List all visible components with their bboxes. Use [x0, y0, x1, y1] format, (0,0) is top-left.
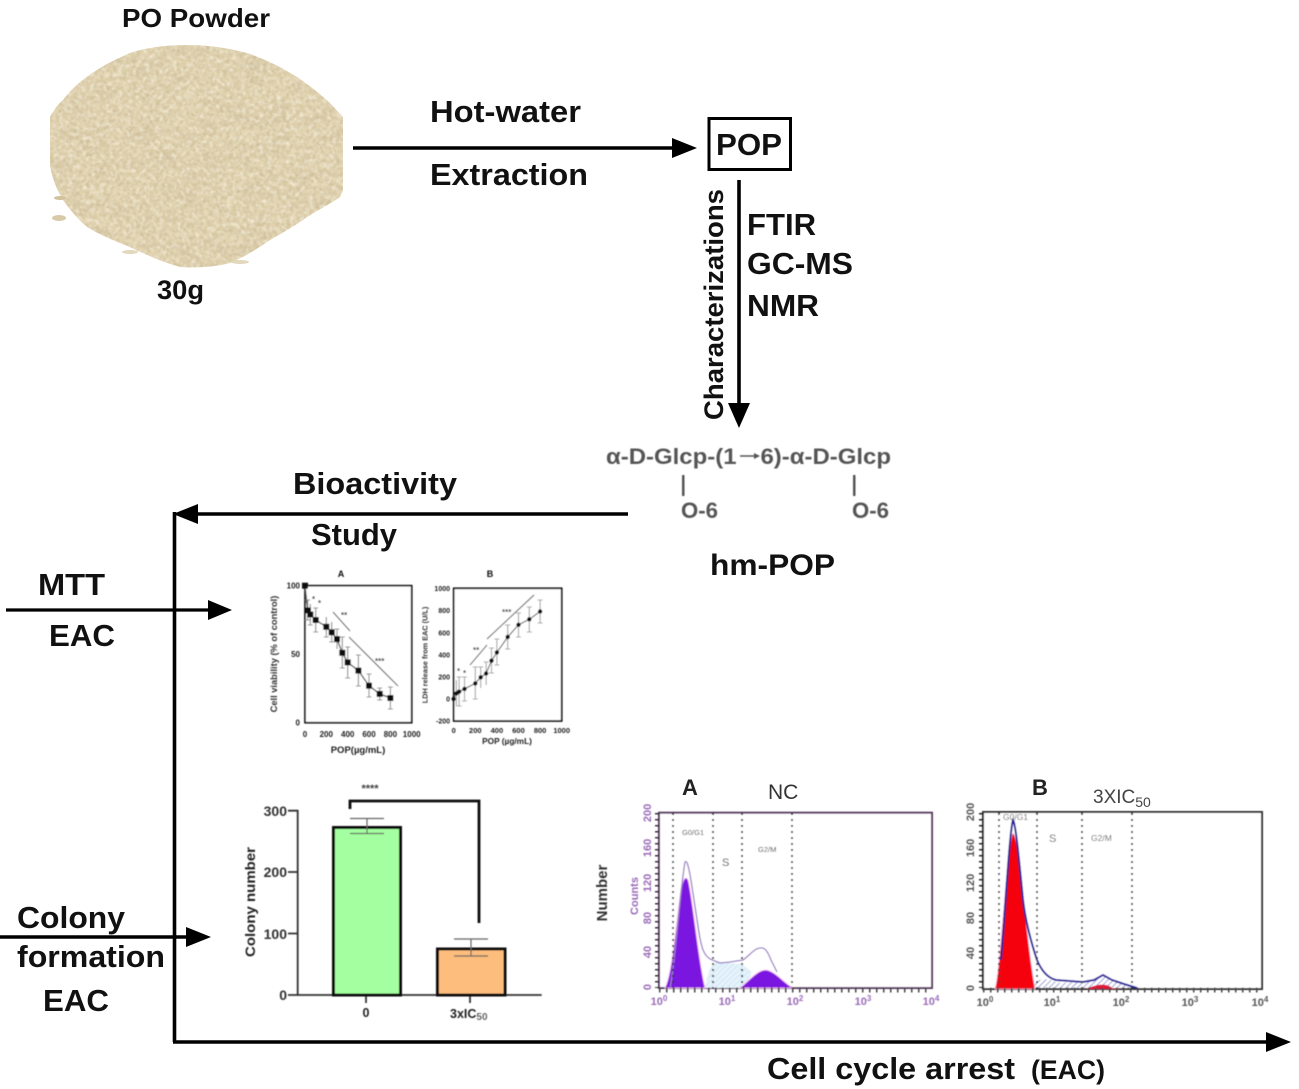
structure: repeating unit: α-D-Glcp-(1 →6)-α-D-Glcp: [606, 444, 891, 469]
chart: flow cytometry 3XIC50: 10: [1113, 997, 1125, 1009]
chart B: LDH release: 200: [438, 674, 450, 682]
arrow: MTT to viability charts: [6, 600, 232, 620]
chart: flow cytometry NC: 10: [719, 996, 731, 1008]
chart A: cell viability: 0: [303, 730, 308, 739]
chart: flow cytometry 3XIC50: 10: [1182, 997, 1194, 1009]
icon: powder heap: [45, 40, 350, 272]
chart: flow cytometry 3XIC50: [965, 803, 1269, 1009]
label: Number axis: Number: [594, 865, 611, 921]
chart B: LDH release: 800: [438, 608, 450, 615]
label: EAC (MTT): EAC: [49, 618, 115, 653]
structure: repeating unit: O-6: [852, 498, 889, 523]
chart: flow cytometry NC: [629, 804, 940, 1008]
structure: repeating unit: O-6: [681, 498, 718, 523]
chart B: LDH release: 800: [534, 726, 546, 735]
chart A: cell viability: [269, 569, 421, 756]
label: Study: Study: [311, 517, 398, 552]
chart A: cell viability: 50: [291, 650, 301, 659]
heading: B 3XIC50: B: [1032, 775, 1048, 800]
chart B: LDH release: **: [473, 646, 480, 655]
chart B: LDH release: 1000: [553, 726, 570, 735]
chart: flow cytometry 3XIC50: 40: [965, 947, 977, 959]
chart B: LDH release: 600: [512, 726, 525, 735]
label: 30g: 30g: [157, 275, 204, 305]
chart: flow cytometry NC: 4: [935, 994, 940, 1003]
text block: characterization methods: NMR: [747, 288, 819, 323]
chart: flow cytometry 3XIC50: 120: [965, 874, 977, 892]
chart B: LDH release: 0: [452, 726, 456, 735]
text block: characterization methods: GC-MS: [747, 246, 853, 281]
label: Colony formation EAC: EAC: [43, 983, 109, 1018]
bar chart: colony number: 200: [264, 864, 287, 880]
chart A: cell viability: 0: [296, 718, 301, 728]
chart B: LDH release: B: [487, 569, 494, 579]
chart: flow cytometry 3XIC50: 2: [1125, 995, 1130, 1004]
chart B: LDH release: 400: [491, 726, 503, 735]
chart: flow cytometry 3XIC50: 10: [1044, 997, 1056, 1009]
chart: flow cytometry NC: 120: [642, 874, 654, 892]
chart: flow cytometry 3XIC50: 3: [1194, 995, 1199, 1004]
chart: flow cytometry NC: 10: [787, 996, 799, 1008]
chart: flow cytometry 3XIC50: G2/M: [1091, 833, 1112, 843]
chart: flow cytometry NC: 0: [663, 994, 668, 1003]
chart A: cell viability: 800: [384, 730, 398, 739]
chart: flow cytometry NC: 160: [642, 839, 654, 857]
chart: flow cytometry NC: S: [722, 857, 729, 869]
chart: flow cytometry 3XIC50: 1: [1056, 995, 1061, 1004]
heading: B 3XIC50: [1032, 775, 1151, 810]
label: Extraction: Extraction: [430, 157, 588, 192]
chart B: LDH release: LDH release from EAC (U/L): [420, 606, 430, 703]
chart: flow cytometry NC: 2: [799, 994, 804, 1003]
chart: flow cytometry NC: Counts: [629, 877, 641, 915]
chart B: LDH release: ***: [502, 608, 512, 617]
chart: flow cytometry 3XIC50: G0/G1: [1003, 812, 1028, 822]
arrow: bioactivity frame to cell cycle: [173, 512, 1291, 1052]
heading: B 3XIC50: 3XIC: [1093, 787, 1135, 808]
chart A: cell viability: POP(µg/mL): [331, 745, 385, 756]
bar chart: colony number: 0: [363, 1006, 370, 1020]
bar chart: colony number: 0: [279, 987, 287, 1003]
chart: flow cytometry NC: 40: [642, 946, 654, 958]
heading: A NC: A: [682, 775, 698, 800]
chart: flow cytometry 3XIC50: 10: [977, 997, 989, 1009]
label: Hot-water: Hot-water: [430, 94, 581, 129]
text block: characterization methods: [747, 207, 853, 323]
label: Colony formation EAC: Colony: [17, 900, 126, 935]
chart: flow cytometry NC: 3: [867, 994, 872, 1003]
chart B: LDH release: 600: [438, 630, 450, 638]
label: Characterizations: Characterizations: [699, 189, 729, 420]
arrow: colony formation to bar chart: [0, 927, 211, 947]
arrow: POP to structure: [728, 180, 750, 428]
bar chart: colony number: ****: [361, 783, 379, 795]
chart A: cell viability: *: [312, 595, 316, 604]
bar chart: colony number: 100: [264, 926, 287, 942]
chart: flow cytometry 3XIC50: 4: [1264, 995, 1269, 1004]
chart B: LDH release: -200: [436, 718, 450, 726]
chart: flow cytometry NC: 10: [923, 996, 935, 1008]
label: Cell cycle arrest (EAC): (EAC): [1031, 1055, 1105, 1085]
chart B: LDH release: 0: [446, 696, 450, 704]
chart A: cell viability: ***: [375, 657, 385, 666]
structure: repeating unit: [606, 444, 891, 523]
chart A: cell viability: 600: [362, 730, 376, 739]
arrow: powder to POP: [353, 138, 697, 158]
chart B: LDH release: 1000: [434, 586, 450, 593]
chart B: LDH release: *: [463, 669, 467, 678]
label: Colony formation EAC: formation: [17, 939, 165, 974]
chart A: cell viability: 100: [287, 582, 301, 590]
chart: flow cytometry 3XIC50: S: [1049, 833, 1056, 845]
chart: flow cytometry NC: 0: [642, 984, 654, 990]
chart: flow cytometry NC: 10: [855, 996, 867, 1008]
chart: flow cytometry 3XIC50: 0: [965, 985, 977, 991]
box: POP: [709, 118, 790, 170]
heading: A NC: [682, 775, 798, 804]
chart: flow cytometry NC: 80: [642, 912, 654, 924]
box: POP: POP: [716, 127, 782, 162]
chart: flow cytometry NC: 1: [731, 994, 736, 1003]
chart: flow cytometry NC: G2/M: [758, 845, 776, 854]
chart B: LDH release: 200: [469, 726, 482, 735]
chart A: cell viability: **: [341, 611, 348, 620]
heading: PO Powder: PO Powder: [122, 3, 270, 33]
chart B: LDH release: 400: [438, 652, 450, 660]
bar chart: colony number: 50: [476, 1012, 488, 1023]
text block: characterization methods: FTIR: [747, 207, 816, 242]
chart A: cell viability: *: [318, 599, 322, 608]
chart: flow cytometry 3XIC50: 160: [965, 839, 977, 857]
label: Bioactivity: Bioactivity: [293, 466, 458, 501]
chart B: LDH release: POP (µg/mL): [482, 736, 532, 746]
chart A: cell viability: Cell viability (% of control): [269, 596, 279, 712]
chart: flow cytometry NC: 10: [651, 996, 663, 1008]
chart A: cell viability: 400: [341, 730, 355, 739]
label: Cell cycle arrest (EAC): Cell cycle arrest: [767, 1051, 1015, 1086]
arrow: structure to bioactivity frame: [173, 504, 628, 524]
chart A: cell viability: 200: [320, 730, 334, 739]
bar chart: colony number: Colony number: [242, 846, 258, 957]
heading: A NC: NC: [768, 781, 798, 804]
bar chart: colony number: [242, 783, 542, 1023]
chart B: LDH release: *: [457, 667, 461, 676]
label: Colony formation EAC: [17, 900, 165, 1018]
chart: flow cytometry NC: 200: [642, 804, 654, 822]
chart: flow cytometry NC: G0/G1: [682, 828, 704, 837]
chart: flow cytometry 3XIC50: 80: [965, 912, 977, 924]
chart: flow cytometry 3XIC50: 10: [1252, 997, 1264, 1009]
chart B: LDH release: [420, 569, 570, 746]
label: MTT: MTT: [38, 567, 105, 602]
chart: flow cytometry 3XIC50: 0: [989, 995, 994, 1004]
chart: flow cytometry 3XIC50: 200: [965, 803, 977, 821]
bar chart: colony number: 300: [264, 803, 287, 819]
bar chart: colony number: 3xIC: [450, 1007, 476, 1021]
chart A: cell viability: A: [338, 569, 345, 579]
chart A: cell viability: 1000: [403, 730, 421, 739]
label: hm-POP: hm-POP: [710, 549, 835, 582]
heading: B 3XIC50: 50: [1135, 794, 1151, 810]
